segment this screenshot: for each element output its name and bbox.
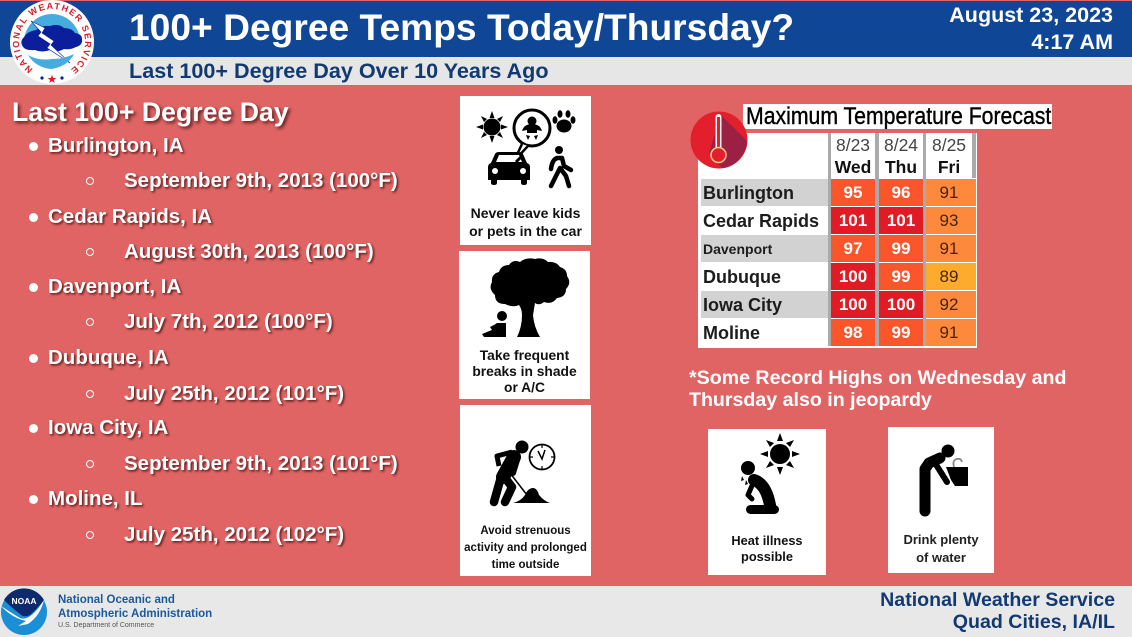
icon: person shovelling with clock [490, 440, 556, 506]
Dubuque Fri [926, 263, 976, 290]
date header Wed: 8/23 [836, 135, 870, 155]
Iowa City Wed: 100 [839, 295, 867, 314]
Iowa City Thu: 100 [887, 295, 915, 314]
footer band [0, 586, 1132, 637]
icon: National Weather Service logo: NATIONAL WEATHER SERVICE [12, 2, 92, 74]
date and time [949, 3, 1113, 54]
Burlington Wed [831, 179, 875, 206]
caption [464, 525, 587, 571]
title: 100+ Degree Temps Today/Thursday? [129, 6, 794, 48]
Davenport: Davenport, IA [48, 275, 181, 298]
caption [469, 205, 582, 239]
Moline Wed [831, 319, 875, 346]
Cedar Rapids Wed [831, 207, 875, 234]
Burlington Thu: 96 [892, 183, 910, 202]
Cedar Rapids Wed: 101 [839, 211, 867, 230]
Moline Fri [926, 319, 976, 346]
Cedar Rapids Thu [879, 207, 923, 234]
Iowa City Fri [926, 291, 976, 318]
icon: person kneeling under sun [741, 433, 800, 514]
Dubuque Thu: 99 [892, 267, 910, 286]
Dubuque date: July 25th, 2012 (101°F) [124, 382, 344, 405]
record highs note: Thursday also in jeopardy [689, 389, 932, 411]
header banner [0, 1, 1132, 57]
Burlington: Burlington, IA [48, 134, 184, 157]
Moline date: July 25th, 2012 (102°F) [124, 523, 344, 546]
Burlington Wed: 95 [844, 183, 862, 202]
caption: Avoid strenuous [480, 525, 571, 537]
record highs note [689, 367, 1066, 411]
Moline Thu [879, 319, 923, 346]
Dubuque Fri: 89 [940, 267, 958, 286]
column separator Thu [875, 133, 879, 346]
date and time: 4:17 AM [1031, 30, 1113, 54]
caption: breaks in shade [472, 364, 577, 379]
Davenport Fri [926, 235, 976, 262]
department of commerce: U.S. Department of Commerce [58, 622, 154, 629]
Cedar Rapids: Cedar Rapids, IA [48, 205, 212, 228]
Iowa City: Iowa City, IA [48, 416, 168, 439]
Davenport Wed: 97 [844, 239, 862, 258]
Burlington date: September 9th, 2013 (100°F) [124, 169, 398, 192]
card: avoid strenuous activity [460, 405, 591, 576]
Dubuque Wed [831, 263, 875, 290]
Burlington Fri: 91 [940, 183, 958, 202]
Cedar Rapids Thu: 101 [887, 211, 915, 230]
footer office name [880, 589, 1115, 633]
Dubuque Wed: 100 [839, 267, 867, 286]
Cedar Rapids Fri [926, 207, 976, 234]
caption: of water [916, 550, 966, 565]
Iowa City Fri: 92 [940, 295, 958, 314]
date and time: August 23, 2023 [949, 3, 1113, 27]
Cedar Rapids date: August 30th, 2013 (100°F) [124, 240, 374, 263]
day header Thu: Thu [885, 157, 917, 177]
icon: NOAA logo: NOAA [11, 596, 37, 606]
NOAA name: National Oceanic and [58, 594, 175, 606]
icon: person sitting under a tree [482, 258, 570, 337]
NOAA name: Atmospheric Administration [58, 608, 212, 620]
caption [903, 532, 979, 565]
Davenport Fri: 91 [940, 239, 958, 258]
icon: person at drinking fountain [920, 444, 968, 516]
Dubuque: Dubuque, IA [48, 346, 169, 369]
record highs note: *Some Record Highs on Wednesday and [689, 367, 1066, 389]
column separators [828, 133, 831, 346]
row Iowa City [701, 291, 828, 318]
row Cedar Rapids: Cedar Rapids [703, 211, 819, 231]
caption: Heat illness [731, 533, 803, 548]
subtitle: Last 100+ Degree Day Over 10 Years Ago [129, 58, 549, 83]
Dubuque Thu [879, 263, 923, 290]
row Moline: Moline [703, 323, 760, 343]
left heading: Last 100+ Degree Day [12, 97, 289, 127]
caption: activity and prolonged [464, 542, 587, 554]
Moline Wed: 98 [844, 323, 862, 342]
caption: or A/C [504, 380, 545, 395]
icon: thermometer [690, 112, 748, 168]
row Davenport: Davenport [703, 241, 772, 257]
NOAA name [58, 594, 212, 620]
row Burlington [701, 179, 828, 206]
column separator Fri [923, 133, 926, 346]
Iowa City Thu [879, 291, 923, 318]
caption: or pets in the car [469, 223, 582, 239]
footer office name: Quad Cities, IA/IL [953, 611, 1115, 633]
Burlington Fri [926, 179, 976, 206]
caption: possible [741, 549, 793, 564]
caption: Drink plenty [903, 532, 979, 547]
Moline: Moline, IL [48, 487, 143, 510]
Davenport Wed [831, 235, 875, 262]
Davenport date: July 7th, 2012 (100°F) [124, 310, 333, 333]
row Burlington: Burlington [703, 183, 794, 203]
column separator end [972, 133, 976, 178]
card: drink plenty of water [888, 427, 994, 573]
icon: sun, child, paw, car and walking person [476, 108, 576, 188]
caption: Never leave kids [471, 205, 580, 221]
forecast table panel [698, 133, 977, 348]
footer office name: National Weather Service [880, 589, 1115, 611]
card: never leave kids or pets in the car [460, 96, 591, 245]
subtitle band [0, 57, 1132, 85]
row Dubuque: Dubuque [703, 267, 781, 287]
Davenport Thu [879, 235, 923, 262]
row Davenport [701, 235, 828, 262]
Iowa City Wed [831, 291, 875, 318]
day header Fri: Fri [938, 157, 960, 177]
Moline Thu: 99 [892, 323, 910, 342]
Davenport Thu: 99 [892, 239, 910, 258]
icon: NOAA logo [1, 588, 47, 635]
row Iowa City: Iowa City [703, 295, 782, 315]
card: heat illness possible [708, 429, 826, 575]
day header Wed: Wed [835, 157, 871, 177]
date header Thu: 8/24 [884, 135, 918, 155]
caption: Take frequent [480, 348, 569, 363]
Burlington Thu [879, 179, 923, 206]
card: take frequent breaks [459, 251, 590, 399]
caption [731, 533, 803, 564]
caption [472, 348, 577, 395]
date header Fri: 8/25 [932, 135, 966, 155]
Moline Fri: 91 [940, 323, 958, 342]
Cedar Rapids Fri: 93 [940, 211, 958, 230]
caption: time outside [492, 559, 559, 571]
list of last 100+ degree days [29, 134, 400, 548]
Iowa City date: September 9th, 2013 (101°F) [124, 452, 398, 475]
